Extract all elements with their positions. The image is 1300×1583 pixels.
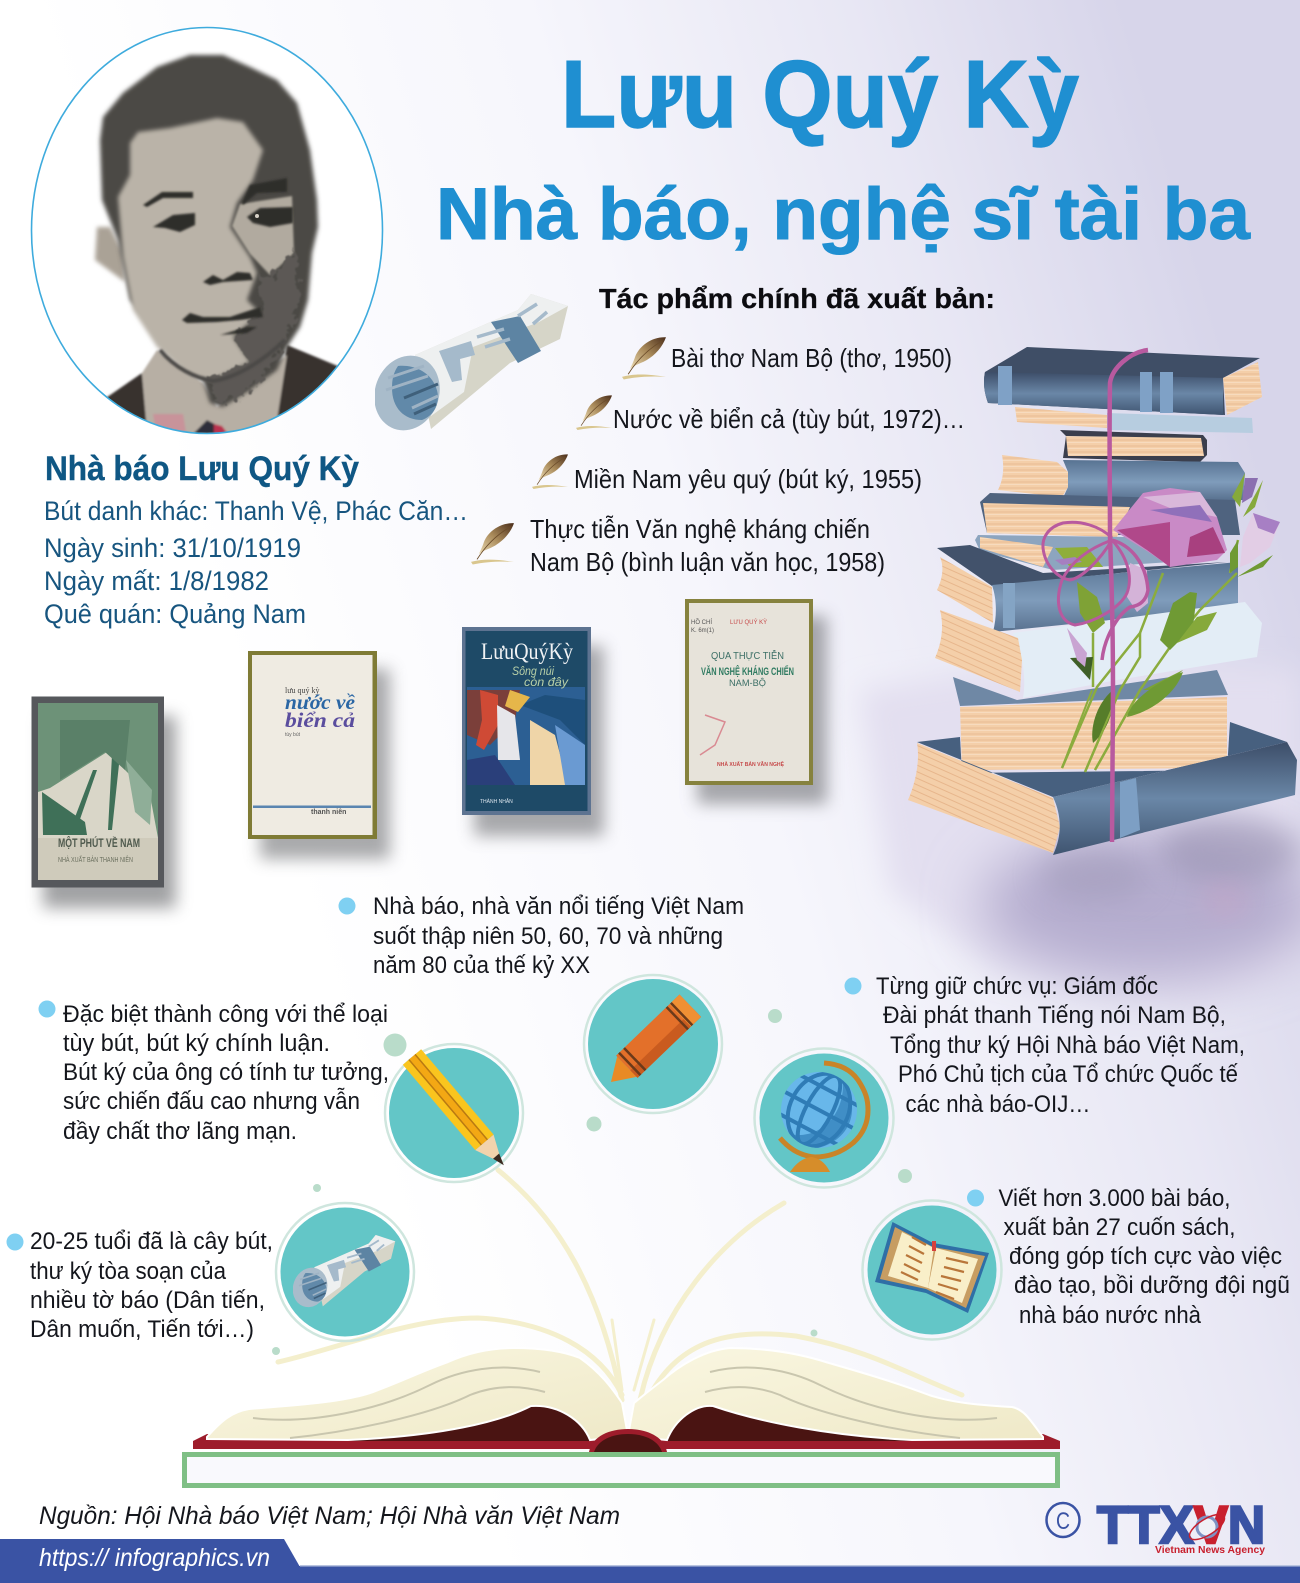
bullet: positions held	[844, 973, 1245, 1118]
bullet: essay success	[38, 1000, 389, 1145]
book cover: Một phút về Nam: NHÀ XUẤT BẢN THANH NIÊN	[58, 854, 133, 864]
stems and leaves	[1055, 473, 1273, 772]
bullet: essay success: đầy chất thơ lãng mạn.	[63, 1118, 297, 1145]
book stack	[908, 347, 1297, 855]
logo TTXVN: TTXVN	[1097, 1496, 1265, 1555]
ribbon	[1043, 350, 1148, 842]
book cover: Sông núi còn đây: còn đây	[524, 675, 569, 689]
book cover: Nước về biển cả: nước về	[285, 690, 356, 714]
bullet: publications: Viết hơn 3.000 bài báo,	[998, 1185, 1230, 1212]
portrait photo	[106, 344, 338, 433]
book cover: Sông núi còn đây: LưuQuýKỳ	[481, 639, 573, 664]
title: Nhà báo, nghệ sĩ tài ba	[436, 174, 1251, 255]
bullet: early career	[6, 1228, 273, 1343]
bullet: publications: xuất bản 27 cuốn sách,	[1004, 1214, 1236, 1241]
icon: open book circle	[862, 1200, 1002, 1340]
book cover: Nước về biển cả: lưu quý kỳ	[285, 686, 320, 695]
book cover: Một phút về Nam	[32, 696, 176, 908]
book cover: Nước về biển cả: tùy bút	[285, 732, 301, 738]
book cover: Qua thực tiễn văn nghệ kháng chiến Nam Bộ	[685, 599, 827, 804]
works heading: Tác phẩm chính đã xuất bản:	[599, 283, 995, 314]
bullet: early career: thư ký tòa soạn của	[30, 1258, 226, 1285]
bullet: early career: nhiều tờ báo (Dân tiến,	[30, 1287, 265, 1314]
bullet: positions held: các nhà báo-OIJ…	[906, 1091, 1090, 1118]
portrait: jacket and shirt	[100, 345, 340, 440]
book cover: Nước về biển cả	[248, 651, 390, 859]
logo TTXVN: Vietnam News Agency	[1155, 1544, 1265, 1556]
works list	[471, 283, 995, 577]
bullet: essay success: Đặc biệt thành công với thể loại	[63, 1001, 388, 1028]
flowers	[1055, 478, 1280, 667]
bullet: publications	[967, 1185, 1290, 1329]
bullet: essay success: Bút ký của ông có tính tư tưởng,	[63, 1059, 389, 1086]
works list: Bài thơ Nam Bộ (thơ, 1950)	[671, 343, 952, 373]
book cover: Sông núi còn đây	[462, 627, 604, 836]
book cover: Sông núi còn đây: THÀNH NHÂN	[480, 798, 513, 805]
bullet: positions held: Tổng thư ký Hội Nhà báo Việt Nam,	[890, 1032, 1245, 1059]
bullet: essay success: sức chiến đấu cao nhưng vẫn	[63, 1088, 360, 1115]
book cover: Qua thực tiễn văn nghệ kháng chiến Nam Bộ: NHÀ XUẤT BẢN VĂN NGHỆ	[717, 760, 785, 768]
book cover: Qua thực tiễn văn nghệ kháng chiến Nam Bộ: NAM-BỘ	[729, 678, 766, 688]
icon: rolled newspaper	[364, 294, 568, 440]
icon: feather 1	[622, 337, 666, 380]
source URL: https:// infographics.vn	[39, 1544, 270, 1572]
biography block: Quê quán: Quảng Nam	[44, 599, 306, 629]
works list: Nước về biển cả (tùy bút, 1972)…	[613, 404, 965, 434]
biography block: Ngày sinh: 31/10/1919	[44, 533, 301, 563]
works list: Nam Bộ (bình luận văn học, 1958)	[530, 547, 885, 577]
bullet: journalist fame: suốt thập niên 50, 60, 70 và những	[373, 923, 723, 950]
green frame under book	[184, 1454, 1058, 1486]
book cover: Qua thực tiễn văn nghệ kháng chiến Nam Bộ: LƯU QUÝ KỲ	[730, 619, 767, 626]
portrait outline	[32, 28, 382, 434]
icon: pencil circle	[385, 1044, 523, 1182]
title: Lưu Quý Kỳ	[561, 41, 1079, 148]
info circles	[276, 975, 1002, 1341]
portrait: head	[95, 55, 318, 407]
icon: newspaper circle	[276, 1203, 414, 1341]
bullet: positions held: Từng giữ chức vụ: Giám đốc	[876, 973, 1158, 1000]
book cover: Qua thực tiễn văn nghệ kháng chiến Nam Bộ: VĂN NGHỆ KHÁNG CHIẾN	[701, 665, 794, 678]
biography block: Bút danh khác: Thanh Vệ, Phác Căn…	[44, 496, 468, 526]
open book illustration	[193, 1348, 1060, 1452]
bullet: essay success: tùy bút, bút ký chính luận.	[63, 1030, 330, 1057]
works list: Miền Nam yêu quý (bút ký, 1955)	[574, 464, 922, 494]
icon: crayon circle	[584, 975, 722, 1113]
bullet: journalist fame: năm 80 của thế kỷ XX	[373, 952, 590, 979]
biography block: Ngày mất: 1/8/1982	[44, 566, 269, 596]
bullet: journalist fame	[338, 893, 744, 979]
logo TTXVN: C	[1056, 1508, 1070, 1535]
portrait: beard shadow	[208, 250, 300, 405]
book cover: Nước về biển cả: thanh niên	[311, 809, 346, 816]
biography block	[44, 450, 468, 629]
bullet: positions held: Đài phát thanh Tiếng nói Nam Bộ,	[883, 1002, 1226, 1029]
decorative cream swirls	[278, 1170, 962, 1400]
bullet: publications: nhà báo nước nhà	[1019, 1302, 1201, 1329]
title	[436, 41, 1251, 255]
footer band	[0, 1539, 1300, 1583]
name heading: Nhà báo Lưu Quý Kỳ	[45, 450, 359, 488]
book cover: Qua thực tiễn văn nghệ kháng chiến Nam Bộ: QUA THỰC TIỄN	[711, 649, 784, 662]
book cover: Qua thực tiễn văn nghệ kháng chiến Nam Bộ: K. 6m(1)	[691, 628, 714, 634]
bullet: positions held: Phó Chủ tịch của Tổ chức Quốc tế	[898, 1061, 1238, 1088]
published book covers	[32, 599, 827, 908]
book cover: Sông núi còn đây: Sông núi	[512, 664, 554, 678]
icon: feather 3	[532, 454, 568, 489]
book cover: Qua thực tiễn văn nghệ kháng chiến Nam Bộ: HỒ CHÍ	[691, 619, 712, 626]
works list: Thực tiễn Văn nghệ kháng chiến	[530, 514, 870, 544]
icon: feather 2	[576, 395, 612, 430]
icon: feather 4	[471, 523, 514, 564]
watercolor wash behind books	[860, 670, 1300, 1000]
bullet: early career: Dân muốn, Tiến tới…)	[30, 1316, 254, 1343]
book cover: Một phút về Nam: MỘT PHÚT VỀ NAM	[58, 835, 140, 850]
bullet: early career: 20-25 tuổi đã là cây bút,	[30, 1228, 273, 1255]
decorative green dots	[272, 1009, 912, 1355]
portrait: facial features	[143, 178, 293, 335]
source line: Nguồn: Hội Nhà báo Việt Nam; Hội Nhà văn Việt Nam	[39, 1502, 620, 1530]
icon: globe circle	[754, 1048, 894, 1188]
book cover: Nước về biển cả: biển cả	[285, 708, 355, 732]
bullet: publications: đóng góp tích cực vào việc	[1009, 1243, 1282, 1270]
bullet: journalist fame: Nhà báo, nhà văn nổi tiếng Việt Nam	[373, 893, 744, 920]
